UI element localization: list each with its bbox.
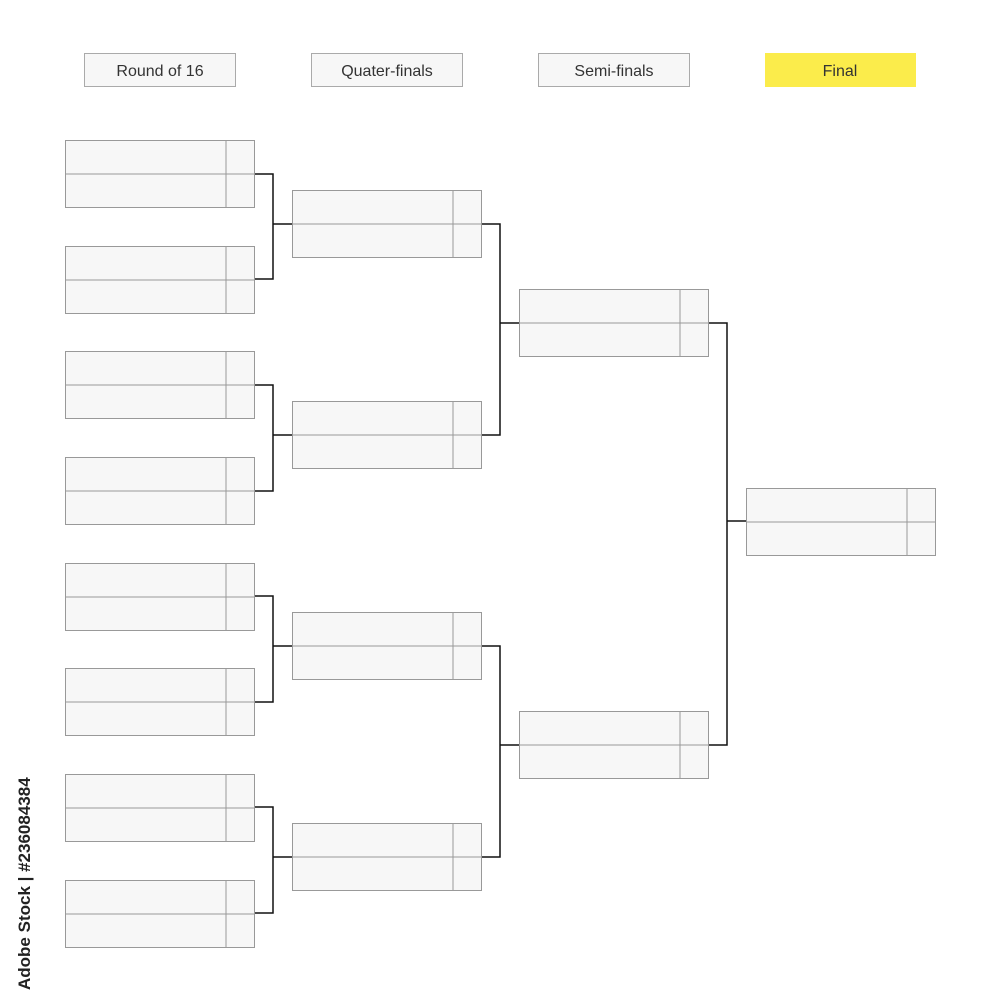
header: Final: Final [823,63,857,80]
quarter-final matches [292,190,482,890]
header: Quarter-finals [312,54,462,86]
round of 16 matches [66,140,254,948]
header: Round of 16: Round of 16 [116,63,204,80]
watermark id text: Adobe Stock | #236084384 [15,777,34,990]
header: Quarter-finals: Quater-finals [341,63,433,80]
header: Semi-finals [538,54,690,86]
connectors: bracket lines [255,174,746,913]
header: Semi-finals: Semi-finals [574,63,654,80]
semi-final matches [520,290,708,778]
header: Round of 16 [84,54,236,86]
final match [746,488,936,556]
header: Final [765,53,916,87]
